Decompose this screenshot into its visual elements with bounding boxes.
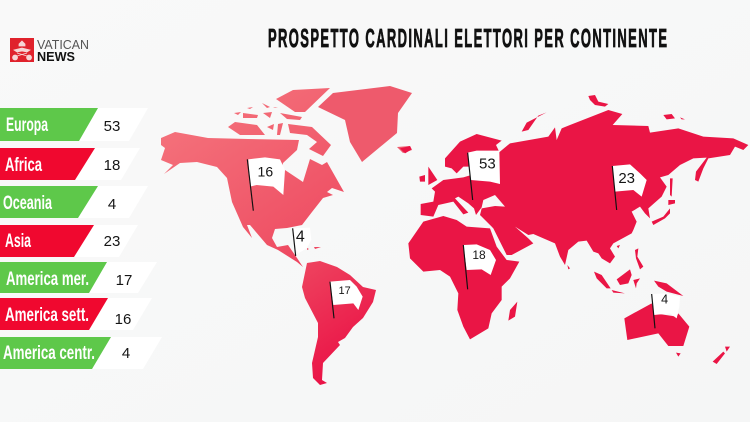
row: Europa: Europa <box>6 115 48 136</box>
shape: Scandinavia <box>445 134 502 173</box>
row: America centrale <box>0 337 162 369</box>
logo: Vatican News: VATICAN <box>37 37 89 52</box>
flag: 53 Europa: 53 <box>479 156 496 173</box>
row: Africa: 18 <box>104 157 120 174</box>
flag: 4 Oceania: 4 <box>661 292 668 306</box>
row: Oceania <box>0 186 148 218</box>
panel: continent table <box>0 108 162 369</box>
row: America settentrionale: America sett. <box>5 305 89 326</box>
flag: 23 Asia <box>612 164 647 210</box>
row: Asia <box>0 225 138 257</box>
flag: 17 America meridionale <box>330 280 363 318</box>
title: PROSPETTO CARDINALI ELETTORI PER CONTINENTE <box>268 24 667 53</box>
flag: 16 America settentrionale: 16 <box>258 164 273 180</box>
row: Africa <box>0 148 140 180</box>
row: America meridionale: 17 <box>116 272 132 289</box>
row: Asia: 23 <box>104 233 120 250</box>
row: America centrale: 4 <box>122 345 130 362</box>
map: Eurasia, Africa and Oceania <box>400 95 748 364</box>
row: America settentrionale <box>0 298 152 330</box>
flag: 18 Africa <box>463 244 496 289</box>
logo: Vatican News <box>10 37 89 64</box>
shape: Australia <box>624 303 689 346</box>
row: Oceania: 4 <box>108 196 116 213</box>
row: America meridionale: America mer. <box>6 269 89 290</box>
shape: Africa <box>408 216 519 339</box>
flag: 4 Oceania <box>652 292 680 328</box>
flag: 53 Europa <box>468 151 500 200</box>
flag: 18 Africa: 18 <box>472 248 486 262</box>
row: America meridionale <box>0 262 157 293</box>
flag: 16 America settentrionale <box>247 157 285 211</box>
shape: Eurasia <box>421 110 748 265</box>
row: Europa <box>0 108 148 141</box>
row: Europa: 53 <box>104 118 120 135</box>
row: Africa: Africa <box>5 155 42 176</box>
row: America centrale: America centr. <box>3 343 95 364</box>
flag: 4 America centrale <box>293 228 311 256</box>
logo: Vatican News: NEWS <box>37 49 75 64</box>
map: North America and Arctic islands <box>161 88 344 267</box>
flag: 4 America centrale: 4 <box>296 228 305 245</box>
map: South America <box>302 261 376 385</box>
shape: islands <box>400 95 730 364</box>
flag: 23 Asia: 23 <box>618 170 635 187</box>
map: Greenland and Iceland <box>318 86 412 162</box>
row: Asia: Asia <box>5 231 31 252</box>
flag: 17 America meridionale: 17 <box>339 285 351 297</box>
row: America settentrionale: 16 <box>115 311 131 328</box>
row: Oceania: Oceania <box>3 193 52 214</box>
